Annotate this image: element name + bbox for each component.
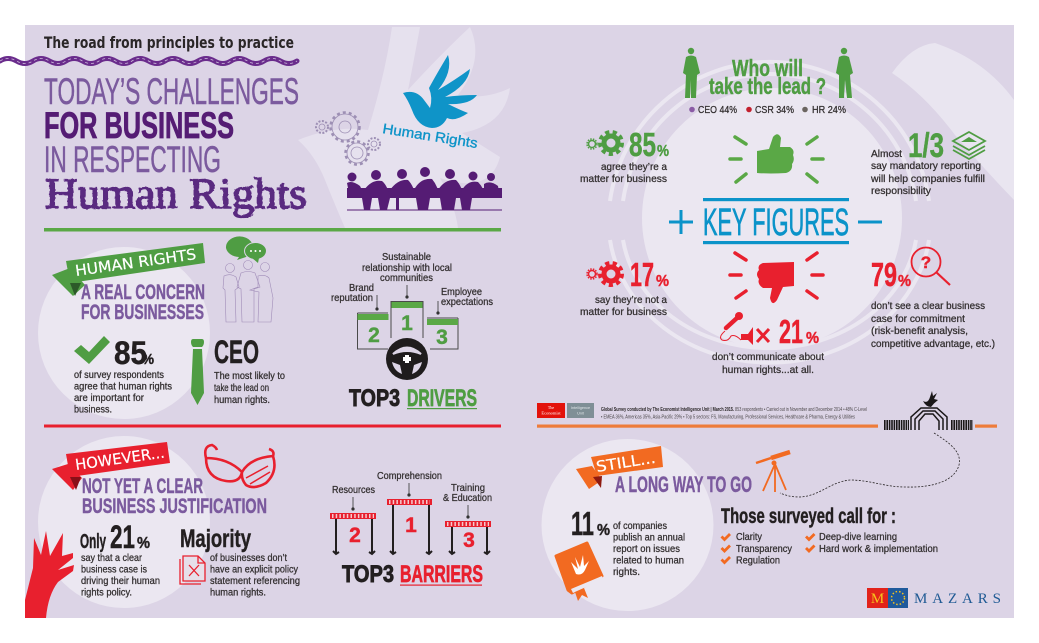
legend: HR 24% [812, 104, 846, 116]
icon: man right [836, 48, 853, 98]
heading [82, 475, 267, 518]
stat: 17%: 17 [630, 256, 654, 293]
stat: only 21%: Only [80, 531, 107, 553]
heading: key figures: KEY FIGURES [703, 202, 849, 244]
checklist: Regulation [736, 554, 780, 566]
icon: stacked layers [953, 132, 985, 159]
stat: 1/3: Almost [871, 148, 902, 160]
text: annual report: report on issues [613, 543, 680, 555]
text: most likely: The most likely to [214, 370, 285, 382]
text: annual report: rights. [613, 566, 640, 578]
text: don't communicate: human rights...at all. [722, 364, 814, 376]
stat: only 21% [80, 519, 150, 555]
text: mandatory reporting: will help companies fulfill [870, 173, 985, 185]
circle backdrop [38, 436, 210, 608]
heading: BUSINESS JUSTIFICATION [82, 495, 267, 518]
icon: steering wheel [386, 338, 428, 380]
text: matter for business [580, 161, 667, 185]
logo: mazars: MAZARS [914, 591, 1001, 607]
icon: red hand [25, 531, 74, 618]
podium: 3 [436, 326, 448, 349]
subtitle: The road from principles to practice [44, 33, 294, 52]
text: mandatory reporting: say mandatory reporting [871, 160, 981, 172]
heading: top3 barriers [342, 561, 483, 588]
ribbon: still [576, 446, 663, 489]
stat: 11%: % [597, 522, 610, 539]
driver labels [331, 251, 493, 308]
divider: red [44, 424, 501, 428]
checklist: Clarity [736, 531, 763, 543]
text: most likely: take the lead on [214, 382, 269, 394]
text: business case: driving their human [81, 575, 160, 587]
hurdles: 3 [463, 529, 475, 552]
text: not a matter: matter for business [580, 306, 667, 318]
wavy road line [0, 58, 297, 64]
text: survey respondents [74, 369, 172, 416]
legend [689, 104, 846, 116]
stat: 85%: % [142, 351, 154, 368]
heading: who will take the lead: take the lead ? [709, 73, 826, 99]
text: policy statement [210, 552, 300, 598]
legend: CEO 44% [698, 104, 737, 116]
text: policy statement: statement referencing [210, 575, 300, 587]
stat: only 21%: % [137, 535, 150, 552]
icon: telescope [756, 452, 790, 492]
icon: book with hand [556, 543, 603, 601]
circle backdrop [542, 439, 714, 611]
title: TODAY’S CHALLENGES [44, 71, 299, 112]
icon: tie [191, 339, 204, 405]
panel: top 3 drivers [331, 251, 493, 412]
barrier labels [332, 470, 492, 504]
barrier labels: Training [451, 482, 485, 494]
icon: people outlines [223, 260, 273, 322]
stat: 85%: 85 [114, 335, 147, 371]
driver labels: Sustainable [382, 251, 431, 263]
heading: FOR BUSINESSES [81, 301, 204, 324]
icon: man left [683, 48, 700, 98]
icon: meeting silhouettes [347, 167, 502, 210]
icon: muted microphone [721, 312, 769, 345]
podium: 2 [368, 324, 380, 347]
survey source text: • EMEA 36%, Americas 35%, Asia-Pacific 29% • Top 5 sectors: FS, Manufacturing, Professional Services, Healthcare & Pharma, Energy & Utilities [601, 414, 855, 420]
text: most likely [214, 370, 285, 406]
ribbon: however [52, 442, 170, 490]
text: don't communicate: don’t communicate about [712, 351, 824, 363]
panel: however [25, 436, 300, 618]
driver labels: Employee [441, 286, 482, 298]
driver labels: expectations [441, 296, 493, 308]
icon: magnifier [912, 248, 950, 285]
heading: top3 drivers: TOP3 [349, 385, 400, 412]
podium: 1 [401, 312, 413, 335]
background swoosh [892, 43, 1014, 200]
stat: CEO: CEO [214, 334, 259, 370]
background dove silhouette [298, 27, 510, 228]
heading: who will take the lead [709, 55, 826, 99]
text: survey respondents: agree that human rights [74, 380, 172, 392]
text: business case: rights policy. [81, 586, 132, 598]
text: annual report [613, 520, 685, 578]
icon: gears [316, 112, 380, 164]
barrier labels: Resources [332, 484, 375, 496]
driver labels: communities [380, 272, 433, 284]
panel: key figures [580, 48, 995, 376]
logo: mazars: M [871, 591, 884, 607]
podium [358, 302, 458, 349]
connector ticks [376, 285, 439, 314]
text: business case: don’t see a clear business [871, 300, 985, 312]
text: survey respondents: are important for [74, 392, 144, 404]
text: not a matter [580, 294, 667, 318]
icon: magnifier: ? [921, 253, 931, 272]
icon: green gears [587, 132, 622, 154]
text: mandatory reporting [870, 160, 985, 197]
icon: thumbs down [730, 253, 823, 303]
icon: speech bubbles [226, 236, 266, 263]
circle backdrop and rings [610, 62, 929, 363]
stat: 21%: % [806, 330, 819, 347]
dashed trail [780, 433, 959, 497]
heading: key figures [669, 198, 882, 244]
ribbon: however: HOWEVER... [74, 444, 166, 474]
driver labels: relationship with local [362, 262, 452, 274]
hurdles: 2 [349, 524, 361, 547]
barrier labels: & Education [443, 492, 492, 504]
survey source text: Global Survey conducted by The Economist Intelligence Unit | March 2015. 853 respondents • Carried out in November and December 2014 • 48% C-Level [601, 407, 867, 413]
stat: 1/3: 1/3 [908, 127, 944, 165]
heading: who will take the lead: Who will [732, 55, 803, 81]
driver labels: reputation [331, 292, 373, 304]
heading: top3 drivers: DRIVERS [407, 385, 477, 412]
icon: check mark [74, 336, 110, 364]
text: business case: competitive advantage, etc.) [871, 338, 995, 350]
title: FOR BUSINESS [44, 105, 234, 146]
checklist [722, 531, 938, 566]
panel: top 3 barriers [330, 470, 492, 588]
stat: 79%: % [898, 273, 911, 290]
source logos [537, 403, 594, 418]
heading: those surveyed: Those surveyed call for : [721, 505, 896, 528]
source logos: Unit [577, 412, 585, 416]
title [44, 71, 307, 218]
heading: top3 barriers: TOP3 [342, 561, 394, 588]
driver labels: Brand [349, 282, 374, 294]
survey source text [601, 407, 867, 420]
text: annual report: related to human [613, 554, 684, 566]
legend: CSR 34% [755, 104, 794, 116]
stat: 17%: % [656, 273, 669, 290]
text: policy statement: have an explicit policy [210, 564, 299, 576]
source logos: Economist [541, 410, 561, 416]
text: business case: (risk-benefit analysis, [871, 325, 968, 337]
heading [81, 281, 205, 324]
text: matter for business: agree they’re a [601, 161, 667, 173]
stat: 85%: % [657, 143, 669, 160]
barrier labels: Comprehension [377, 470, 442, 482]
hurdles [330, 499, 491, 554]
stat: 11%: 11 [571, 505, 594, 542]
source logos: The [548, 405, 554, 410]
checklist: Hard work & implementation [819, 543, 938, 555]
checklist: Transparency [736, 543, 793, 555]
ribbon: human rights: HUMAN RIGHTS [74, 245, 197, 280]
heading: top3 drivers [349, 385, 477, 412]
text: matter for business: matter for business [580, 173, 667, 185]
stat: 21%: 21 [779, 313, 803, 350]
stat: 85%: 85 [629, 126, 656, 163]
text: mandatory reporting: responsibility [871, 185, 932, 197]
stat: 1/3 [871, 127, 944, 165]
stat: only 21%: 21 [110, 519, 135, 555]
text: business case: say that a clear [81, 552, 142, 564]
heading: top3 barriers: BARRIERS [400, 561, 483, 588]
icon: human rights dove logo [403, 55, 477, 128]
text: don't communicate [712, 351, 824, 376]
ribbon: human rights [52, 243, 205, 296]
icon: glasses [205, 445, 274, 487]
text: business case: case for commitment [871, 313, 965, 325]
icon: bridge with crowd and hand [884, 391, 973, 430]
text: business case: business case is [81, 564, 147, 576]
icon: red gears [587, 263, 622, 285]
title: Human Rights [45, 171, 307, 218]
text: business case [81, 552, 160, 598]
text: not a matter: say they’re not a [595, 294, 667, 306]
panel: still a long way to go [542, 439, 938, 611]
divider: green [44, 228, 501, 232]
connector ticks [352, 483, 469, 518]
text: annual report: publish an annual [613, 532, 685, 544]
stat: 79%: 79 [871, 256, 897, 293]
source logos: Intelligence [571, 406, 590, 410]
text: survey respondents: business. [74, 404, 112, 416]
hurdles: 1 [405, 514, 417, 537]
text: survey respondents: of survey respondents [74, 369, 164, 381]
text: annual report: of companies [613, 520, 667, 532]
heading: NOT YET A CLEAR [82, 475, 203, 498]
heading: A REAL CONCERN [81, 281, 205, 304]
icon: document with cross [180, 556, 205, 584]
logo label: Human Rights [382, 120, 479, 151]
panel: human rights concern [38, 236, 285, 419]
title: IN RESPECTING [44, 139, 221, 180]
text: policy statement: human rights. [210, 586, 266, 598]
checklist: Deep-dive learning [819, 531, 897, 543]
text: most likely: human rights. [214, 394, 270, 406]
icon: thumbs up [730, 134, 823, 182]
ribbon: still: STILL... [595, 449, 657, 476]
text: business case [871, 300, 995, 350]
circle backdrop [38, 247, 210, 419]
text: policy statement: of businesses don’t [210, 552, 287, 564]
logo: mazars [867, 588, 1001, 608]
heading: A LONG WAY TO GO [615, 472, 752, 497]
stat: majority: Majority [180, 525, 251, 553]
orange line [537, 424, 997, 428]
